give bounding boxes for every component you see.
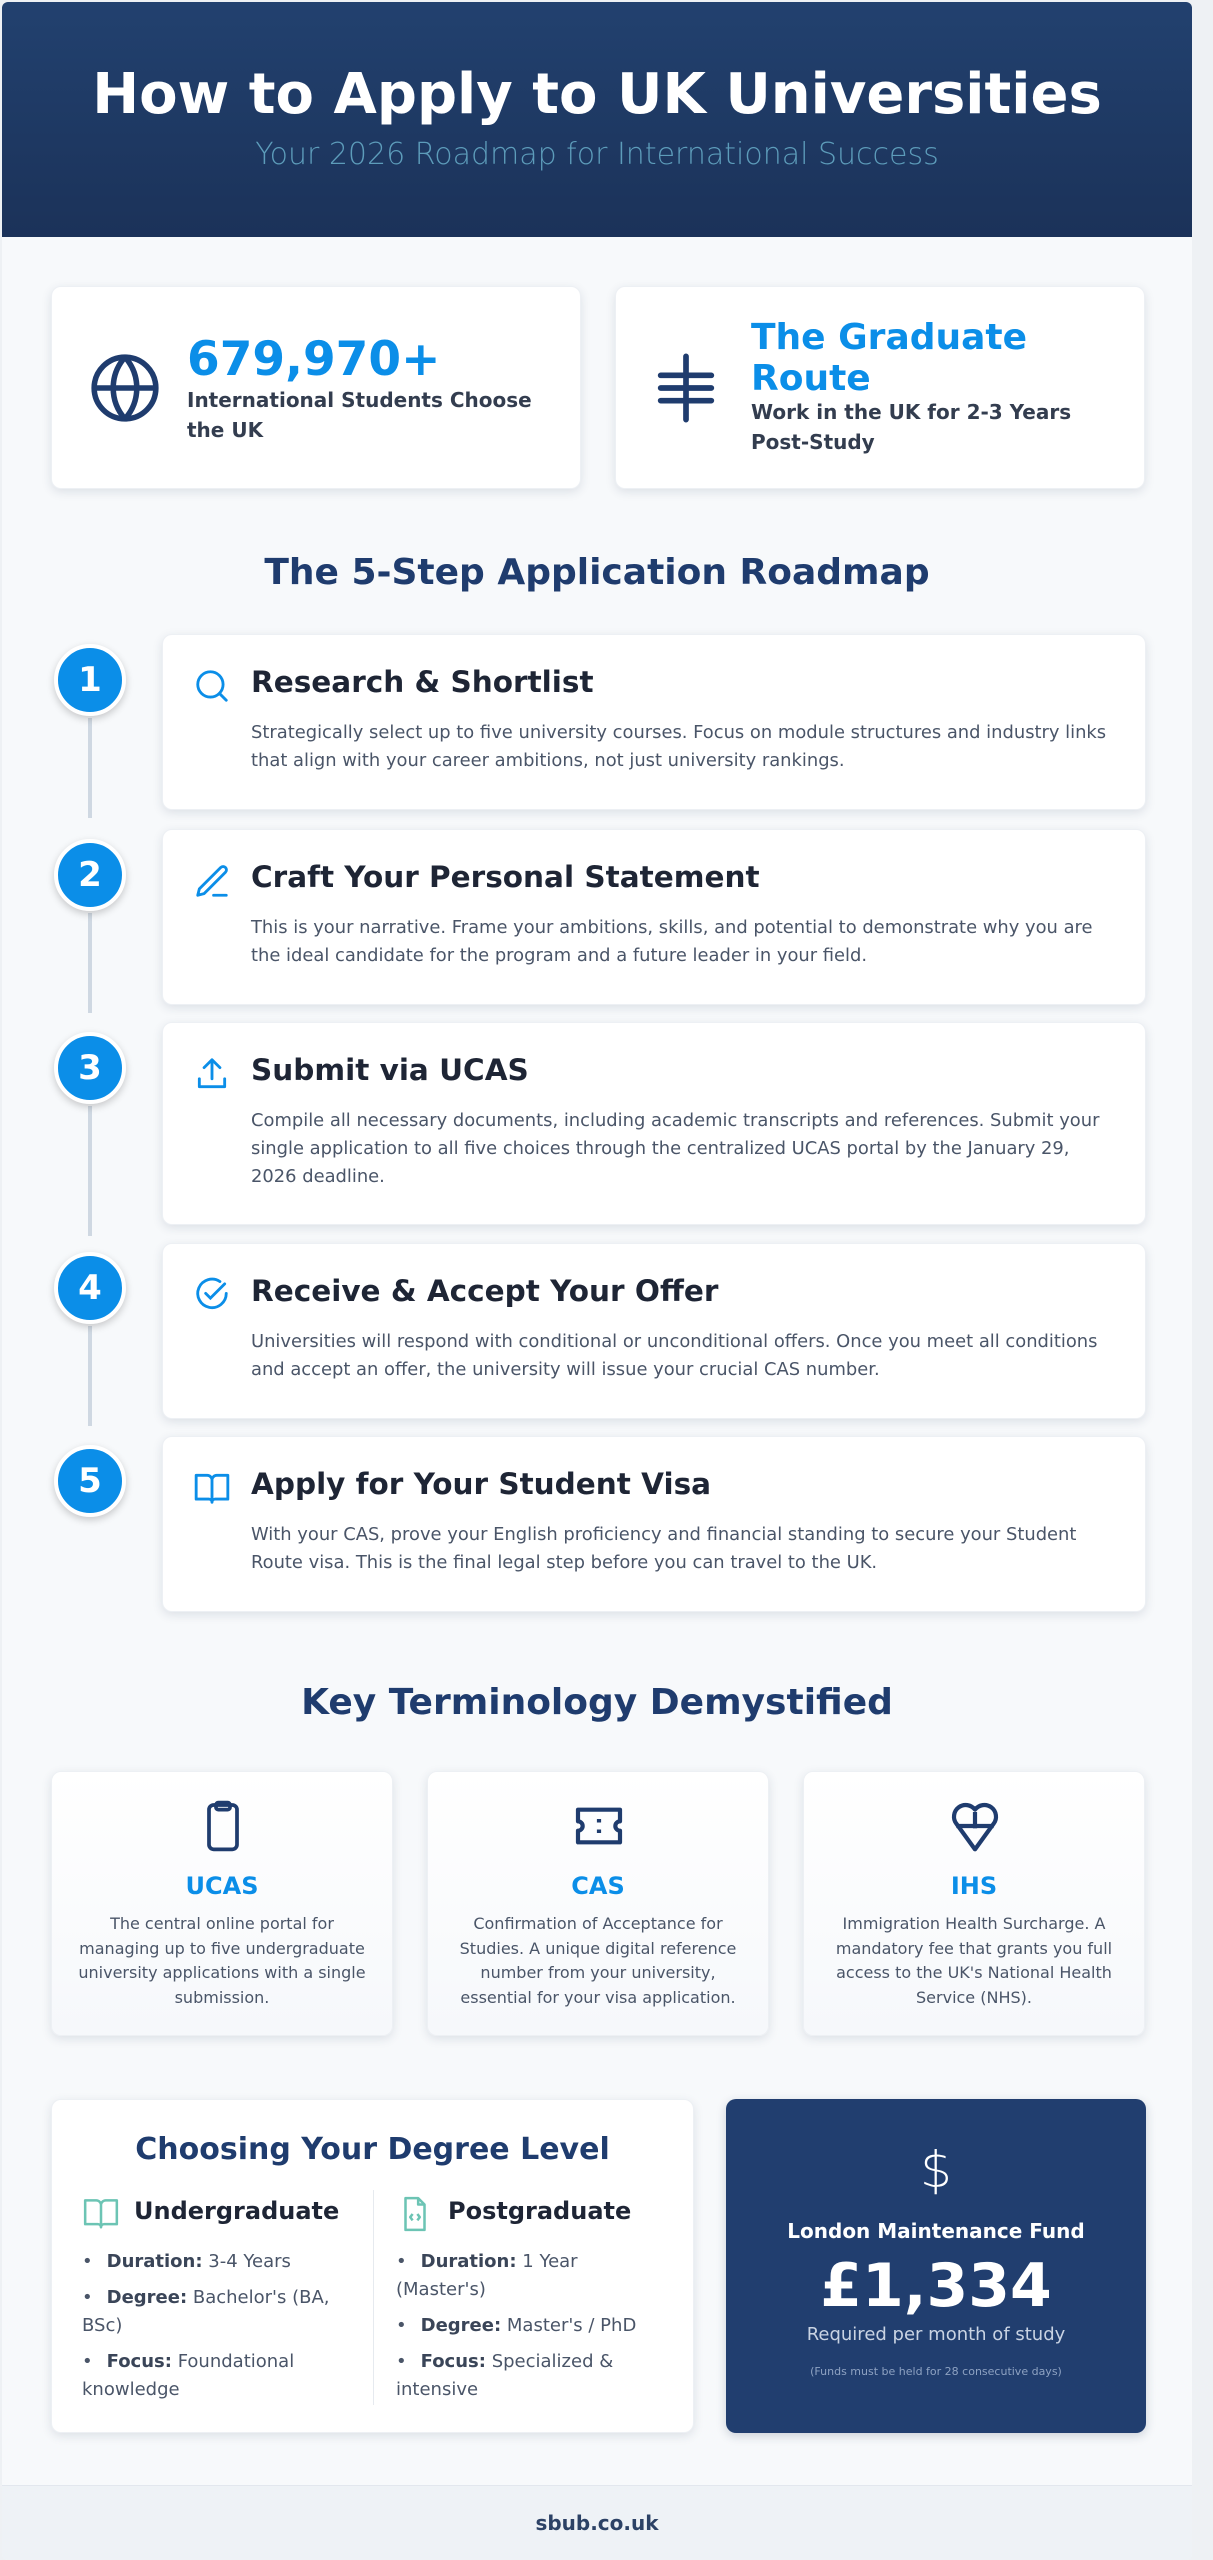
step 5 number: 5	[78, 1461, 102, 1501]
column: postgraduate	[396, 2196, 636, 2400]
icon: upload	[198, 1058, 226, 1088]
route title: The Graduate	[751, 317, 1027, 358]
term card: CAS: CAS	[571, 1872, 625, 1900]
footer	[2, 2485, 1192, 2560]
step 5 number	[54, 1445, 126, 1517]
step 2 number: 2	[78, 855, 102, 895]
term card: IHS: IHS	[951, 1872, 997, 1900]
degree level panel: Focus: Specialized & intensive	[396, 2351, 613, 2400]
icon: dollar: $	[920, 2141, 952, 2199]
degree level panel: Duration: 1 Year (Master's)	[396, 2251, 578, 2300]
degree level panel: Duration: 3-4 Years	[107, 2251, 291, 2272]
icon: pen	[196, 865, 228, 897]
degree heading: Choosing Your Degree Level	[135, 2132, 610, 2167]
footer: sbub.co.uk	[535, 2511, 659, 2535]
icon: search	[196, 670, 228, 702]
fund amount: £1,334	[820, 2251, 1052, 2321]
step 3 number	[54, 1032, 126, 1104]
term card: CAS: Confirmation of Acceptance for Studies. A unique digital reference number from your university, essential for your visa application.	[460, 1914, 736, 2006]
degree level panel: Degree: Bachelor's (BA, BSc)	[82, 2287, 330, 2336]
step 5 card	[162, 1436, 1146, 1612]
title: How to Apply to UK Universities	[92, 62, 1102, 127]
step 3 card: Compile all necessary documents, including academic transcripts and references. Submit your single application to all five choices through the centralized UCAS portal by the January 29, 2026 deadline.	[251, 1110, 1099, 1187]
degree level panel: Focus: Foundational knowledge	[82, 2351, 294, 2400]
term card: CAS	[427, 1771, 769, 2036]
step 1 number	[54, 644, 126, 716]
column: undergraduate	[82, 2197, 339, 2400]
stat card: graduate route	[615, 286, 1145, 489]
icon: clipboard	[207, 1800, 239, 1852]
step 2 card	[162, 829, 1146, 1005]
step 2 number	[54, 839, 126, 911]
degree level panel: Degree: Master's / PhD	[421, 2315, 636, 2336]
step 1 card: Research & Shortlist	[251, 665, 594, 699]
icon: globe	[91, 354, 159, 422]
step 3 card: Submit via UCAS	[251, 1053, 529, 1087]
timeline lines	[88, 718, 92, 818]
subtitle: Your 2026 Roadmap for International Success	[255, 137, 939, 172]
step 3 number: 3	[78, 1048, 102, 1088]
step 4 card: Receive & Accept Your Offer	[251, 1274, 718, 1308]
step 4 number	[54, 1252, 126, 1324]
divider	[373, 2190, 374, 2405]
icon: check circle	[196, 1278, 228, 1310]
term card: IHS	[803, 1771, 1145, 2036]
route title: Route	[751, 358, 871, 399]
section heading: terminology: Key Terminology Demystified	[301, 1682, 893, 1723]
term card: UCAS: The central online portal for managing up to five undergraduate university applications with a single submission.	[78, 1914, 366, 2006]
term card: IHS: Immigration Health Surcharge. A mandatory fee that grants you full access to the UK's National Health Service (NHS).	[836, 1914, 1112, 2006]
step 5 card: With your CAS, prove your English proficiency and financial standing to secure your Student Route visa. This is the final legal step before you can travel to the UK.	[251, 1524, 1076, 1573]
fund note: Required per month of study	[807, 2324, 1065, 2345]
step 4 number: 4	[78, 1268, 102, 1308]
term card: UCAS: UCAS	[186, 1872, 258, 1900]
route title	[751, 317, 1027, 399]
step 4 card	[162, 1243, 1146, 1419]
icon: ticket	[576, 1808, 622, 1844]
step 2 card: This is your narrative. Frame your ambitions, skills, and potential to demonstrate why you are the ideal candidate for the program and a future leader in your field.	[251, 917, 1093, 966]
step 2 card: Craft Your Personal Statement	[251, 860, 760, 894]
maintenance fund panel	[726, 2099, 1146, 2433]
icon: heart shield	[952, 1802, 998, 1852]
icon: book	[194, 1474, 230, 1504]
term card: UCAS	[51, 1771, 393, 2036]
step 5 card: Apply for Your Student Visa	[251, 1467, 711, 1501]
fund footnote: (Funds must be held for 28 consecutive days)	[810, 2365, 1062, 2378]
step 3 card	[162, 1022, 1146, 1225]
degree level panel: Undergraduate	[134, 2197, 339, 2225]
header banner	[2, 2, 1192, 237]
step 1 card: Strategically select up to five university courses. Focus on module structures and industry links that align with your career ambitions, not just university rankings.	[251, 722, 1106, 771]
section heading: roadmap: The 5-Step Application Roadmap	[264, 552, 930, 593]
fund label: London Maintenance Fund	[787, 2219, 1085, 2243]
step 1 number: 1	[78, 660, 102, 700]
step 1 card	[162, 634, 1146, 810]
degree level panel	[51, 2099, 694, 2433]
route label: Work in the UK for 2-3 Years Post-Study	[751, 400, 1071, 454]
stat label: International Students Choose the UK	[187, 388, 532, 442]
step 4 card: Universities will respond with conditional or unconditional offers. Once you meet all conditions and accept an offer, the university will issue your crucial CAS number.	[251, 1331, 1097, 1380]
icon: signpost	[658, 354, 714, 422]
degree level panel: Postgraduate	[448, 2197, 631, 2225]
stat number: 679,970+	[187, 332, 440, 387]
stat card: students	[51, 286, 581, 489]
